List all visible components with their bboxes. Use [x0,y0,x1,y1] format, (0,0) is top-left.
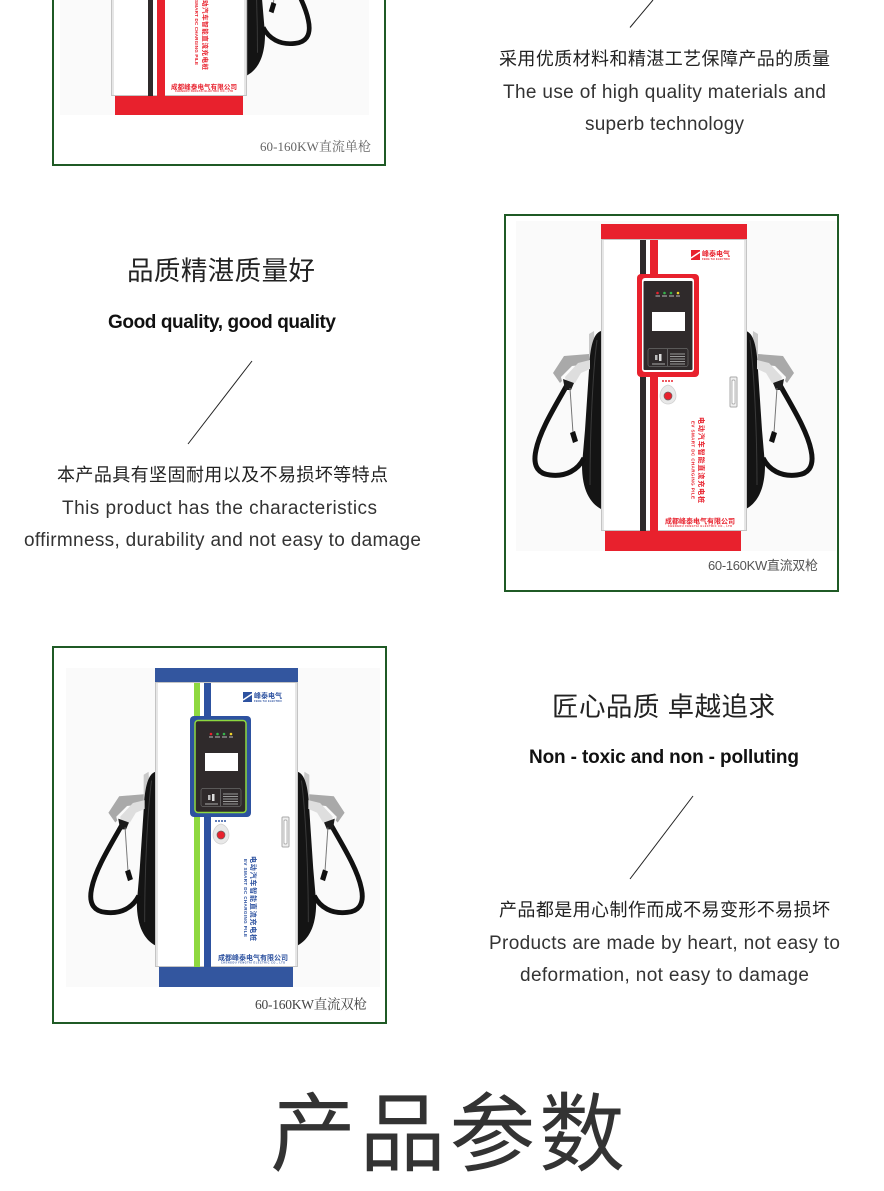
panel: single gun charger photo [53,0,385,165]
text block: craftsmanship: deformation, not easy to damage [520,965,809,986]
logo: FENG TAI ELECTRIC [254,700,282,703]
icon: right charging gun [298,772,362,946]
charger cabinet: CHENGDU FENGTAI ELECTRIC CO., LTD [175,90,233,93]
text block: quality: offirmness, durability and not easy to damage [24,530,421,551]
charger cabinet: EV SMART DC CHARGING PILE [690,421,696,499]
charger cabinet: CHENGDU FENGTAI ELECTRIC CO., LTD [668,525,732,528]
logo [243,691,282,703]
logo: FENG TAI ELECTRIC [702,258,730,261]
emergency button [660,381,676,404]
emergency button [213,821,229,844]
panel: blue double gun charger photo [53,647,386,1023]
logo [691,249,730,261]
charger cabinet: SMART DC CHARGING PILE [194,0,199,65]
charger cabinet [155,668,298,987]
charger cabinet: 电动汽车智能直流充电桩 [697,417,706,503]
heading: good quality [108,256,336,333]
section title: 产品参数 [270,1087,625,1183]
icon: left charging gun [91,772,155,946]
text block: craftsmanship: Products are made by heart, not easy to [489,933,840,954]
diagonal line: top right [630,0,653,28]
icon: left charging gun [535,331,601,509]
text block: quality [24,465,421,551]
logo: 峰泰电气 [254,691,282,700]
text block: materials: 采用优质材料和精湛工艺保障产品的质量 [499,49,830,69]
text block: quality: 本产品具有坚固耐用以及不易损坏等特点 [57,465,388,485]
heading: good quality: 品质精湛质量好 [127,256,315,286]
icon: right charging gun [746,331,812,509]
heading: craftsmanship: Non - toxic and non - polluting [529,747,799,768]
charger cabinet [112,0,246,115]
charger cabinet: 动汽车智能直流充电桩 [201,0,210,70]
control panel [637,274,699,377]
caption: 60-160KW直流双枪 [255,996,368,1012]
charger cabinet: EV SMART DC CHARGING PILE [243,859,248,937]
text block: quality: This product has the characteristics [62,498,377,519]
charger cabinet: 成都峰泰电气有限公司 [218,953,288,962]
diagonal line: quality [188,361,252,444]
door handle [730,377,737,407]
text block: materials: superb technology [585,114,744,135]
caption: 60-160KW直流双枪 [708,558,818,573]
diagonal line: craftsmanship [630,796,693,879]
icon: charging gun [247,0,309,75]
charger cabinet [601,224,747,551]
heading: craftsmanship [529,692,799,768]
heading: craftsmanship: 匠心品质 卓越追求 [552,692,775,722]
control panel [190,716,251,817]
text block: craftsmanship [489,900,840,986]
charger cabinet: 成都峰泰电气有限公司 [665,516,735,526]
text block: materials [499,49,830,135]
heading: good quality: Good quality, good quality [108,312,336,333]
caption: 60-160KW直流单枪 [260,139,371,154]
charger cabinet: 电动汽车智能直流充电桩 [249,856,258,941]
text block: materials: The use of high quality materials and [503,82,826,103]
logo: 峰泰电气 [702,249,730,258]
panel: red double gun charger photo [505,215,838,591]
charger cabinet: 成都峰泰电气有限公司 [171,82,237,91]
door handle [282,817,289,847]
text block: craftsmanship: 产品都是用心制作而成不易变形不易损坏 [499,900,830,920]
charger cabinet: CHENGDU FENGTAI ELECTRIC CO., LTD [221,962,285,964]
